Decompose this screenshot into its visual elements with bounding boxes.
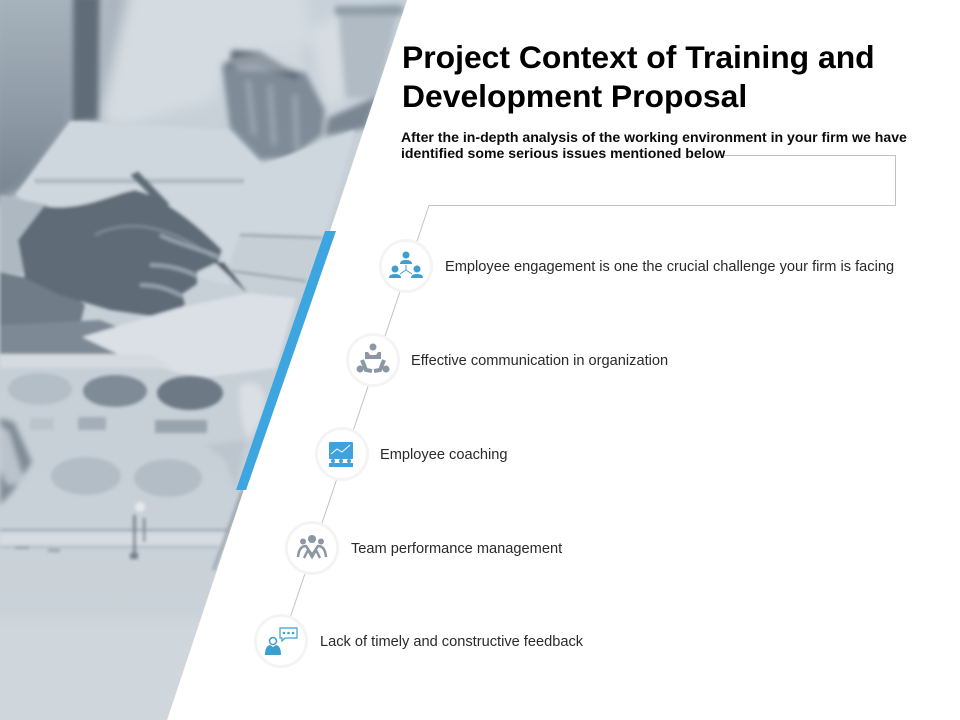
text: communication: Effective communication in organization (411, 353, 668, 369)
text: coaching: Employee coaching (380, 447, 508, 463)
item 1: employee engagement (379, 239, 894, 293)
text: feedback: Lack of timely and constructive feedback (320, 634, 583, 650)
text: team performance: Team performance management (351, 541, 562, 557)
subtitle: After the in-depth analysis of the working environment in your firm we have (401, 128, 907, 144)
icon: circular meeting (346, 333, 400, 387)
subtitle (401, 128, 907, 160)
item 2: communication (346, 333, 668, 387)
item 5: feedback (254, 614, 583, 668)
panel: desk photo (0, 0, 407, 720)
icon: person with speech bubble (254, 614, 308, 668)
subtitle: identified some serious issues mentioned below (401, 144, 725, 160)
title (402, 39, 875, 114)
icon: team hierarchy (379, 239, 433, 293)
title: Project Context of Training and (402, 39, 875, 75)
text: engagement: Employee engagement is one the crucial challenge your firm is facing (445, 259, 894, 275)
icon: team group (285, 521, 339, 575)
title: Development Proposal (402, 78, 747, 114)
item 3: coaching (315, 427, 508, 481)
item 4: team performance (285, 521, 562, 575)
icon: presentation chart (315, 427, 369, 481)
